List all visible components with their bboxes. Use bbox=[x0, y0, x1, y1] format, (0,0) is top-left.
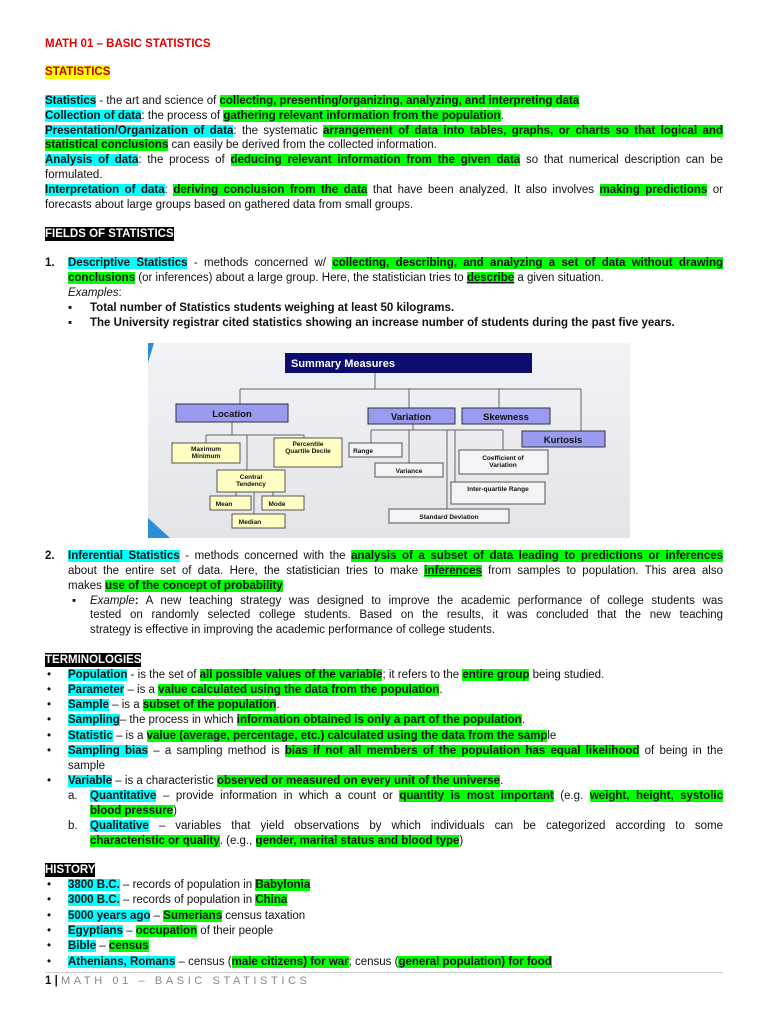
box: maximum minimum: Maximum bbox=[191, 446, 221, 453]
text block: definitions: Presentation/Organization of data: the systematic arrangement of data into tables, graphs, or charts so that logical and bbox=[45, 125, 723, 137]
list: terminologies: characteristic or quality. (e.g., gender, marital status and blood type) bbox=[90, 835, 463, 847]
text block: definitions: Collection of data: the process of gathering relevant information from the population. bbox=[45, 110, 504, 122]
text block: definitions: statistical conclusions can easily be derived from the collected information. bbox=[45, 139, 437, 151]
list: terminologies: Quantitative – provide information in which a count or quantity is most important (e.g. weight, height, systolic bbox=[90, 790, 723, 802]
text block: definitions bbox=[45, 95, 723, 211]
box: skewness bbox=[462, 408, 550, 424]
text block: descriptive statistics: The University registrar cited statistics showing an increase number of students during the past five years. bbox=[90, 317, 675, 329]
box: central tendency: Tendency bbox=[236, 481, 266, 488]
box: coefficient of variation bbox=[459, 450, 548, 474]
box: variance: Variance bbox=[396, 468, 423, 475]
box: maximum minimum bbox=[172, 443, 240, 463]
box: variation: Variation bbox=[391, 412, 431, 423]
box: range: Range bbox=[353, 448, 373, 455]
list: terminologies: Qualitative – variables that yield observations by which individuals can be categorized according to some bbox=[90, 820, 723, 832]
box: mean bbox=[210, 496, 251, 510]
list: history: • bbox=[47, 879, 51, 891]
list: terminologies: Sample – is a subset of the population. bbox=[68, 699, 280, 711]
box: variance bbox=[375, 463, 443, 477]
list: terminologies: Sampling bias – a sampling method is bias if not all members of the population has equal likelihood of being in the bbox=[68, 745, 723, 757]
list: terminologies: • bbox=[47, 684, 51, 696]
text block: inferential statistics: 2. bbox=[45, 550, 55, 562]
text block: definitions: Analysis of data: the process of deducing relevant information from the given data so that numerical description can be bbox=[45, 154, 723, 166]
list: history: Athenians, Romans – census (male citizens) for war; census (general population) for food bbox=[68, 956, 552, 968]
list: terminologies: • bbox=[47, 775, 51, 787]
box: summary measures bbox=[285, 353, 532, 373]
list: history bbox=[47, 879, 552, 968]
list: terminologies: blood pressure) bbox=[90, 805, 177, 817]
text block: inferential statistics: about the entire set of data. Here, the statistician tries to make inferences from samples to population. This area also bbox=[68, 565, 723, 577]
box: mode: Mode bbox=[269, 501, 286, 508]
box: inter-quartile range: Inter-quartile Range bbox=[467, 486, 529, 493]
list: terminologies: Parameter – is a value calculated using the data from the population. bbox=[68, 684, 443, 696]
heading: fields of statistics: FIELDS OF STATISTICS bbox=[45, 228, 174, 240]
list: terminologies: b. bbox=[68, 820, 78, 832]
box: median: Median bbox=[239, 519, 261, 526]
text block: inferential statistics: makes use of the concept of probability bbox=[68, 580, 283, 592]
text block: inferential statistics: tested on randomly selected college students. Based on the results, it was concluded that the new teaching bbox=[90, 609, 723, 621]
text block: definitions: formulated. bbox=[45, 169, 103, 181]
list: terminologies: a. bbox=[68, 790, 78, 802]
list: history: • bbox=[47, 956, 51, 968]
list: terminologies: Variable – is a characteristic observed or measured on every unit of the universe. bbox=[68, 775, 503, 787]
box: location: Location bbox=[212, 409, 252, 420]
text block: inferential statistics: strategy is effective in improving the academic performance of college students. bbox=[90, 624, 495, 636]
box: median bbox=[232, 514, 285, 528]
list: history: Bible – census bbox=[68, 940, 149, 952]
list: terminologies: Sampling– the process in which information obtained is only a part of the population. bbox=[68, 714, 525, 726]
list: terminologies: sample bbox=[68, 760, 105, 772]
list: history: • bbox=[47, 894, 51, 906]
list: history: Egyptians – occupation of their people bbox=[68, 925, 273, 937]
text block: inferential statistics: Inferential Statistics - methods concerned with the analysis of a subset of data leading to predictions or inferences bbox=[68, 550, 723, 562]
box: standard deviation: Standard Deviation bbox=[419, 514, 479, 521]
box: summary measures: Summary Measures bbox=[291, 358, 395, 370]
title: MATH 01 – BASIC STATISTICS bbox=[45, 38, 210, 50]
list: terminologies: • bbox=[47, 745, 51, 757]
box: inter-quartile range bbox=[451, 482, 545, 504]
text block: descriptive statistics: Descriptive Statistics - methods concerned w/ collecting, describing, and analyzing a set of data without drawing bbox=[68, 257, 723, 269]
list: history: 3800 B.C. – records of population in Babylonia bbox=[68, 879, 310, 891]
box: coefficient of variation: Coefficient of bbox=[482, 455, 525, 462]
heading: terminologies: TERMINOLOGIES bbox=[45, 654, 141, 666]
box: central tendency: Central bbox=[240, 474, 262, 481]
heading: history: HISTORY bbox=[45, 864, 95, 876]
box: coefficient of variation: Variation bbox=[489, 462, 517, 469]
text block: descriptive statistics: conclusions (or inferences) about a large group. Here, the statistician tries to describe a given situation. bbox=[68, 272, 604, 284]
box: mode bbox=[262, 496, 304, 510]
text block: inferential statistics: Example: A new teaching strategy was designed to improve the academic performance of college students was bbox=[90, 595, 723, 607]
text block: definitions: Interpretation of data: deriving conclusion from the data that have been analyzed. It also involves making predictions or bbox=[45, 184, 723, 196]
box: kurtosis: Kurtosis bbox=[544, 435, 582, 446]
box: maximum minimum: Minimum bbox=[192, 453, 220, 460]
list: terminologies: • bbox=[47, 714, 51, 726]
list: history: • bbox=[47, 925, 51, 937]
text block: descriptive statistics bbox=[45, 257, 723, 329]
text block: inferential statistics: ▪ bbox=[72, 595, 76, 607]
text block: descriptive statistics: 1. bbox=[45, 257, 55, 269]
box: range bbox=[349, 443, 402, 457]
list: terminologies bbox=[47, 669, 723, 847]
text block: descriptive statistics: Examples: bbox=[68, 287, 122, 299]
list: terminologies: Population - is the set of all possible values of the variable; it refers to the entire group being studied. bbox=[68, 669, 604, 681]
box: percentile: Quartile Decile bbox=[285, 448, 331, 455]
list: terminologies: • bbox=[47, 730, 51, 742]
box: standard deviation bbox=[389, 509, 509, 523]
box: percentile: Percentile bbox=[292, 441, 324, 448]
list: history: • bbox=[47, 910, 51, 922]
box: kurtosis bbox=[522, 431, 605, 447]
list: terminologies: • bbox=[47, 669, 51, 681]
text block: definitions: Statistics - the art and science of collecting, presenting/organizing, analyzing, and interpreting data bbox=[45, 95, 579, 107]
text block: descriptive statistics: ▪ bbox=[68, 302, 72, 314]
list: history: 3000 B.C. – records of population in China bbox=[68, 894, 287, 906]
list: terminologies: Statistic – is a value (average, percentage, etc.) calculated using the data from the sample bbox=[68, 730, 556, 742]
text block: inferential statistics bbox=[45, 550, 723, 636]
box: percentile bbox=[274, 438, 342, 467]
chart: summary measures diagram bbox=[148, 343, 630, 538]
text block: descriptive statistics: Total number of Statistics students weighing at least 50 kilograms. bbox=[90, 302, 454, 314]
text block: definitions: forecasts about large groups based on gathered data from small groups. bbox=[45, 199, 413, 211]
box: skewness: Skewness bbox=[483, 412, 529, 423]
box: mean: Mean bbox=[216, 501, 232, 508]
text block: descriptive statistics: ▪ bbox=[68, 317, 72, 329]
list: history: 5000 years ago – Sumerians census taxation bbox=[68, 910, 305, 922]
box: central tendency bbox=[217, 470, 285, 492]
footer: 1 | MATH 01 – BASIC STATISTICS bbox=[45, 975, 310, 987]
box: location bbox=[176, 404, 288, 422]
heading: statistics: STATISTICS bbox=[45, 66, 110, 78]
box: variation bbox=[368, 408, 455, 424]
list: history: • bbox=[47, 940, 51, 952]
list: terminologies: • bbox=[47, 699, 51, 711]
